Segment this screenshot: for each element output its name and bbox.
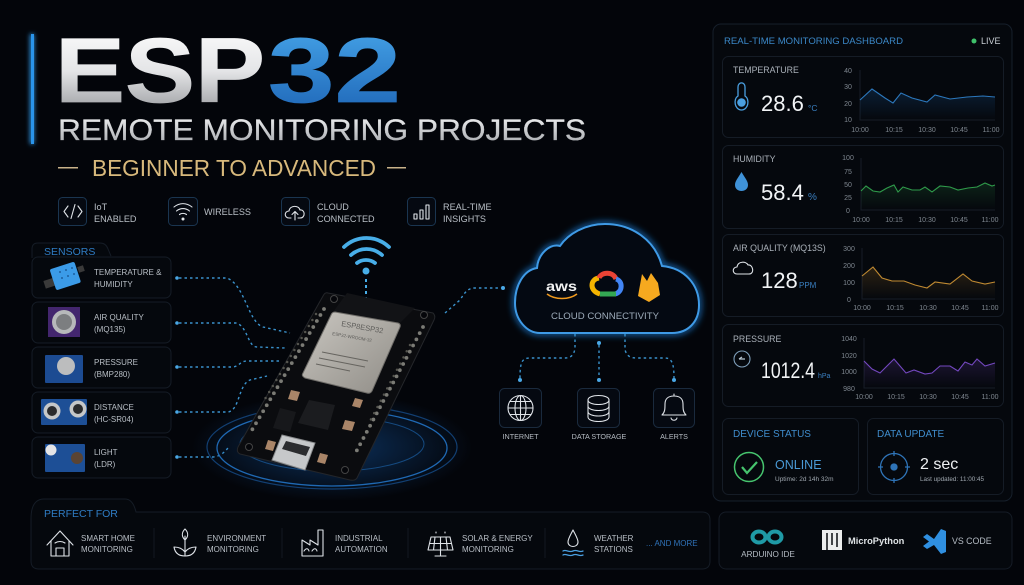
card: device status bbox=[722, 418, 858, 494]
subtitle: REMOTE MONITORING PROJECTS bbox=[58, 114, 586, 147]
chart: air quality: 10:00 bbox=[853, 305, 871, 312]
chart: temperature: 11:00 bbox=[982, 127, 1000, 134]
logo: MicroPython: MicroPython bbox=[848, 536, 905, 546]
card: temperature: 28.6 bbox=[761, 91, 804, 116]
use: solar and energy: SOLAR & ENERGY bbox=[462, 534, 533, 543]
use: solar and energy: MONITORING bbox=[462, 545, 514, 554]
mounting holes bbox=[246, 296, 428, 474]
badge: wireless bbox=[168, 198, 251, 226]
card: data update: DATA UPDATE bbox=[877, 429, 945, 440]
chart: humidity: 10:30 bbox=[918, 217, 936, 224]
chart: air quality: 300 bbox=[843, 246, 855, 253]
card: pressure: 1012.4 bbox=[761, 358, 815, 383]
sensor: distance bbox=[32, 392, 171, 433]
chart: pressure: 1040 bbox=[841, 336, 857, 343]
live indicator bbox=[972, 36, 1001, 46]
sensor: air quality: AIR QUALITY bbox=[94, 313, 144, 322]
chart: temperature: 40 bbox=[844, 68, 852, 75]
chart: air quality: 10:30 bbox=[919, 305, 937, 312]
chart: humidity: 10:45 bbox=[950, 217, 968, 224]
logo: MicroPython bbox=[822, 530, 905, 550]
panel: perfect for bbox=[31, 499, 710, 569]
use: industrial: INDUSTRIAL bbox=[335, 534, 383, 543]
title: ESP bbox=[55, 20, 265, 122]
card: air quality: PPM bbox=[799, 281, 817, 290]
accent bar bbox=[30, 34, 34, 144]
chart: temperature: 10 bbox=[844, 117, 852, 124]
title: 32 bbox=[268, 20, 401, 122]
chart: pressure: 10:30 bbox=[919, 394, 937, 401]
chart: temperature: 10:15 bbox=[885, 127, 903, 134]
card: air quality: AIR QUALITY (MQ13S) bbox=[733, 243, 826, 253]
pin headers bbox=[252, 309, 423, 452]
use: weather stations: STATIONS bbox=[594, 545, 633, 554]
and more label: ... AND MORE bbox=[646, 539, 698, 548]
internet tile: INTERNET bbox=[503, 432, 539, 441]
use: industrial bbox=[302, 530, 388, 556]
sensor: light: LIGHT bbox=[94, 448, 118, 457]
chart: pressure: 1000 bbox=[841, 369, 857, 376]
wifi signal icon bbox=[344, 238, 389, 302]
tagline: BEGINNER TO ADVANCED bbox=[92, 155, 376, 181]
card: air quality: 128 bbox=[761, 268, 798, 293]
chart: temperature: 10:30 bbox=[918, 127, 936, 134]
glowing platform rings bbox=[192, 393, 472, 501]
chart: air quality: 100 bbox=[843, 280, 855, 287]
chart: humidity: 10:15 bbox=[885, 217, 903, 224]
micro USB port bbox=[272, 435, 315, 470]
sensor: temperature and humidity: TEMPERATURE & bbox=[94, 268, 162, 277]
card: humidity: % bbox=[808, 192, 817, 203]
sensor: pressure bbox=[32, 347, 171, 388]
logo: Arduino IDE: ARDUINO IDE bbox=[741, 550, 795, 559]
use: environment: MONITORING bbox=[207, 545, 259, 554]
icon: refresh target bbox=[878, 451, 910, 483]
sensors heading tab: SENSORS bbox=[44, 246, 95, 258]
icon: thermometer bbox=[735, 83, 748, 110]
card: pressure: PRESSURE bbox=[733, 334, 782, 344]
antenna area bbox=[333, 293, 415, 323]
board to cloud line bbox=[445, 286, 505, 313]
sensor: air quality bbox=[32, 302, 171, 343]
sensor: distance: (HC-SR04) bbox=[94, 415, 134, 424]
sensor: light bbox=[32, 437, 171, 478]
use: smart home bbox=[47, 531, 135, 556]
chart: humidity: 0 bbox=[846, 208, 850, 215]
badge: real-time insights: REAL-TIME bbox=[443, 202, 492, 212]
chart: humidity: 10:00 bbox=[852, 217, 870, 224]
wifi module: ESP8ESP32 bbox=[341, 319, 384, 335]
dashboard frame bbox=[713, 24, 1012, 501]
chart: pressure bbox=[841, 336, 999, 401]
dashboard heading: REAL-TIME MONITORING DASHBOARD bbox=[724, 36, 903, 46]
badge: IoT enabled bbox=[58, 198, 137, 226]
chart: humidity: 50 bbox=[844, 182, 852, 189]
badge: cloud connected: CONNECTED bbox=[317, 214, 375, 224]
dividers bbox=[154, 528, 545, 558]
panel: tools bbox=[719, 512, 1012, 569]
logo: Firebase bbox=[638, 273, 660, 302]
icon: gauge bbox=[734, 351, 750, 367]
card: pressure: hPa bbox=[818, 373, 831, 380]
cloud output lines bbox=[518, 334, 676, 382]
logo: VS Code: VS CODE bbox=[952, 536, 992, 546]
card: temperature bbox=[722, 56, 1004, 138]
use: industrial: AUTOMATION bbox=[335, 545, 388, 554]
chip and parts bbox=[298, 400, 335, 430]
sensor: temperature and humidity: HUMIDITY bbox=[94, 280, 133, 289]
badge: wireless: WIRELESS bbox=[204, 207, 251, 217]
card: data update bbox=[868, 418, 1004, 494]
chart: humidity bbox=[842, 155, 999, 224]
chart: pressure: 10:00 bbox=[855, 394, 873, 401]
chart: pressure: 10:15 bbox=[887, 394, 905, 401]
panel: sensors bbox=[32, 243, 171, 478]
card: pressure bbox=[722, 324, 1004, 406]
sensor: light: (LDR) bbox=[94, 460, 116, 469]
card: temperature: TEMPERATURE bbox=[733, 65, 799, 75]
chart: pressure: 980 bbox=[843, 386, 855, 393]
live indicator: LIVE bbox=[981, 36, 1001, 46]
chart: air quality: 200 bbox=[843, 263, 855, 270]
chart: pressure: 1020 bbox=[841, 353, 857, 360]
logo: Google Cloud bbox=[592, 273, 621, 294]
panel: dashboard bbox=[713, 24, 1012, 501]
data storage tile: DATA STORAGE bbox=[572, 432, 627, 441]
card: device status: ONLINE bbox=[775, 458, 822, 472]
use: smart home: MONITORING bbox=[81, 545, 133, 554]
chart: air quality: 10:15 bbox=[886, 305, 904, 312]
chart: air quality: 10:45 bbox=[951, 305, 969, 312]
sensors heading tab bbox=[32, 243, 111, 258]
use: weather stations: WEATHER bbox=[594, 534, 634, 543]
use: solar and energy bbox=[428, 532, 533, 556]
chart: temperature: 10:00 bbox=[851, 127, 869, 134]
use: environment bbox=[174, 529, 266, 556]
feature badges bbox=[58, 198, 492, 226]
use: environment: ENVIRONMENT bbox=[207, 534, 266, 543]
logo: AWS bbox=[546, 278, 577, 298]
card: data update: 2 sec bbox=[920, 456, 958, 473]
chart: air quality: 0 bbox=[847, 297, 851, 304]
sensor: temperature and humidity bbox=[32, 257, 171, 298]
internet tile bbox=[500, 388, 542, 441]
icon: water drop bbox=[735, 172, 748, 191]
badge: IoT enabled: ENABLED bbox=[94, 214, 137, 224]
card: data update: Last updated: 11:00:45 bbox=[920, 476, 984, 483]
sensor: pressure: PRESSURE bbox=[94, 358, 138, 367]
wifi module: ESP32-WROOM-32 bbox=[332, 331, 373, 343]
card: humidity: HUMIDITY bbox=[733, 154, 776, 164]
chart: temperature: 30 bbox=[844, 84, 852, 91]
icon: cloud bbox=[733, 262, 753, 274]
chart: humidity: 100 bbox=[842, 155, 854, 162]
alerts tile bbox=[654, 388, 694, 441]
icon: check circle bbox=[734, 452, 764, 482]
wifi module bbox=[302, 312, 400, 393]
card: temperature: °C bbox=[808, 103, 818, 113]
chart: temperature: 20 bbox=[844, 101, 852, 108]
card: air quality bbox=[722, 234, 1004, 316]
chart: pressure: 10:45 bbox=[951, 394, 969, 401]
ESP32 development board bbox=[237, 293, 435, 480]
use: weather stations bbox=[563, 530, 634, 556]
chart: humidity: 11:00 bbox=[982, 217, 999, 224]
sensor: pressure: (BMP280) bbox=[94, 370, 130, 379]
cloud connectivity bbox=[515, 224, 699, 333]
sensor: air quality: (MQ135) bbox=[94, 325, 126, 334]
badge: IoT enabled: IoT bbox=[94, 202, 108, 212]
chart: pressure: 11:00 bbox=[982, 394, 999, 401]
sensor: distance: DISTANCE bbox=[94, 403, 134, 412]
chart: temperature bbox=[844, 68, 1000, 134]
data storage tile bbox=[572, 388, 627, 441]
alerts tile: ALERTS bbox=[660, 432, 688, 441]
card: device status: Uptime: 2d 14h 32m bbox=[775, 476, 834, 483]
card: humidity: 58.4 bbox=[761, 180, 804, 205]
use: smart home: SMART HOME bbox=[81, 534, 135, 543]
chart: humidity: 25 bbox=[844, 195, 852, 202]
title bbox=[55, 20, 401, 122]
card: humidity bbox=[722, 146, 1004, 228]
logo: AWS: aws bbox=[546, 278, 577, 294]
badge: real-time insights: INSIGHTS bbox=[443, 214, 486, 224]
perfect for outline and tab bbox=[31, 499, 710, 569]
card: device status: DEVICE STATUS bbox=[733, 429, 811, 440]
chart: air quality: 11:00 bbox=[982, 305, 999, 312]
logo: Arduino IDE bbox=[741, 532, 795, 559]
sensor connection lines bbox=[175, 276, 290, 459]
badge: cloud connected: CLOUD bbox=[317, 202, 349, 212]
cloud label: CLOUD CONNECTIVITY bbox=[551, 311, 660, 322]
chart: temperature: 10:45 bbox=[950, 127, 968, 134]
logo: VS Code bbox=[923, 529, 992, 554]
chart: air quality bbox=[843, 246, 999, 312]
badge: cloud connected bbox=[282, 198, 375, 226]
perfect for heading: PERFECT FOR bbox=[44, 508, 118, 520]
chart: humidity: 75 bbox=[844, 169, 852, 176]
badge: real-time insights bbox=[408, 198, 492, 226]
